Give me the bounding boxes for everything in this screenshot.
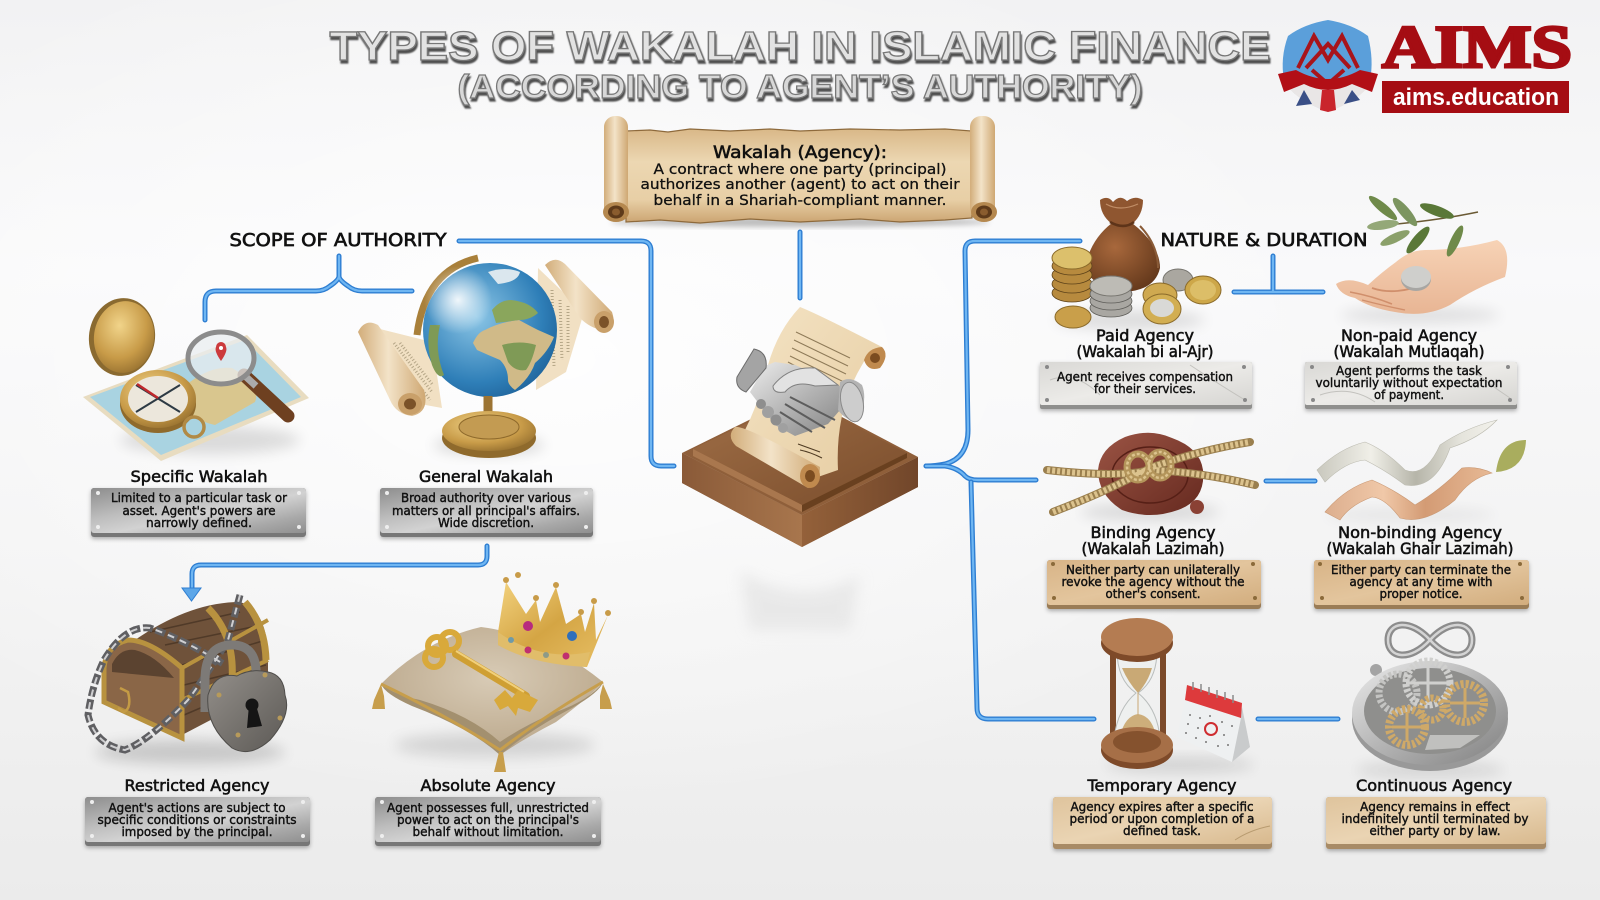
plate: restricted agency xyxy=(85,797,310,846)
logo: AIMS xyxy=(1278,14,1572,113)
plate: paid agency: for their services. xyxy=(1094,382,1196,396)
label: temporary agency: Temporary Agency xyxy=(1087,776,1236,795)
arrow: scope of authority to centre xyxy=(459,241,674,466)
label: non-paid agency xyxy=(1334,326,1484,361)
plate: binding agency: revoke the agency without the xyxy=(1062,575,1244,589)
label: continuous agency: Continuous Agency xyxy=(1356,776,1512,795)
plate: specific wakalah: asset. Agent's powers are xyxy=(122,504,276,518)
plate: paid agency xyxy=(1040,362,1252,409)
label: paid agency: (Wakalah bi al-Ajr) xyxy=(1076,342,1214,361)
label: paid agency: Paid Agency xyxy=(1096,326,1194,345)
plate: restricted agency: specific conditions or constraints xyxy=(98,813,296,827)
plate: temporary agency: period or upon completion of a xyxy=(1070,812,1254,826)
title: TYPES OF WAKALAH IN ISLAMIC FINANCE xyxy=(330,23,1270,69)
label: restricted agency: Restricted Agency xyxy=(124,776,270,795)
plate: binding agency xyxy=(1047,560,1261,609)
arrow: temporary to continuous connector xyxy=(1258,716,1338,722)
plate: continuous agency: either party or by law. xyxy=(1370,824,1500,838)
heading: scope of authority: SCOPE OF AUTHORITY xyxy=(230,230,448,251)
plate: general wakalah xyxy=(380,488,593,537)
arrow: general down to restricted xyxy=(182,546,487,601)
icon: locked chest xyxy=(88,595,287,764)
icon: flowing ribbons and leaf xyxy=(1317,420,1526,522)
plate: specific wakalah xyxy=(91,488,306,537)
arrow: centre to nature and duration xyxy=(926,241,1080,466)
plate: continuous agency: indefinitely until terminated by xyxy=(1342,812,1528,826)
icon: handshake on wooden base xyxy=(682,307,918,630)
plate: absolute agency: Agent possesses full, unrestricted xyxy=(387,801,589,815)
label: specific wakalah: Specific Wakalah xyxy=(130,467,268,486)
arrow: scope branch xyxy=(205,256,412,320)
plate: restricted agency: Agent's actions are subject to xyxy=(108,801,286,815)
icon: open hand with coin and olive branch xyxy=(1336,193,1507,323)
icon: wax seal and knotted rope xyxy=(1047,433,1255,520)
label: binding agency: Binding Agency xyxy=(1090,523,1216,542)
plate: temporary agency xyxy=(1053,797,1272,849)
plate: specific wakalah: narrowly defined. xyxy=(146,516,252,530)
arrow: paid to non-paid connector xyxy=(1234,256,1323,292)
heading: nature and duration: NATURE & DURATION xyxy=(1160,230,1368,251)
plate: binding agency: Neither party can unilaterally xyxy=(1066,563,1240,577)
plate: temporary agency: Agency expires after a specific xyxy=(1070,800,1254,814)
plate: specific wakalah: Limited to a particular task or xyxy=(111,491,287,505)
plate: paid agency: Agent receives compensation xyxy=(1057,370,1233,384)
arrow: centre to temporary xyxy=(971,482,1094,719)
plate: non-paid agency: Agent performs the task xyxy=(1336,364,1482,378)
label: binding agency: (Wakalah Lazimah) xyxy=(1082,539,1224,558)
scroll body text xyxy=(640,162,960,209)
scroll body text: A contract where one party (principal) xyxy=(654,162,946,178)
logo url box: aims.education xyxy=(1393,84,1559,111)
label: non-binding agency xyxy=(1326,523,1514,558)
plate: non-binding agency: agency at any time with xyxy=(1350,575,1492,589)
scroll body text: authorizes another (agent) to act on their xyxy=(640,177,960,193)
plate: general wakalah: matters or all principal's affairs. xyxy=(392,504,580,518)
plate: absolute agency xyxy=(375,797,601,846)
plate: absolute agency: behalf without limitation. xyxy=(412,825,564,839)
plate: non-binding agency: Either party can terminate the xyxy=(1331,563,1511,577)
plate: non-binding agency xyxy=(1314,560,1529,609)
icon: money bag and coins xyxy=(1052,198,1221,329)
icon: key, crown and pillow xyxy=(372,572,612,772)
plate: general wakalah: Wide discretion. xyxy=(438,516,534,530)
plate: absolute agency: power to act on the principal's xyxy=(397,813,579,827)
scroll heading: Wakalah (Agency): xyxy=(713,143,887,163)
plate: non-binding agency: proper notice. xyxy=(1380,587,1462,601)
label: paid agency xyxy=(1076,326,1214,361)
plate: temporary agency: defined task. xyxy=(1123,824,1201,838)
panel: definition scroll xyxy=(603,116,997,227)
plate: non-paid agency xyxy=(1305,362,1517,409)
label: non-binding agency: (Wakalah Ghair Lazimah) xyxy=(1326,539,1514,558)
icon: compass, map and magnifier xyxy=(83,294,309,461)
arrow: binding to non-binding connector xyxy=(1266,478,1315,484)
label: non-paid agency: (Wakalah Mutlaqah) xyxy=(1334,342,1484,361)
label: absolute agency: Absolute Agency xyxy=(420,776,556,795)
plate: non-paid agency: voluntarily without expectation xyxy=(1316,376,1502,390)
icon: globe and scrolls xyxy=(358,258,614,458)
icon: infinity and pocket watch gears xyxy=(1352,625,1508,777)
plate: restricted agency: imposed by the principal. xyxy=(122,825,272,839)
logo wordmark: AIMS xyxy=(1382,14,1572,80)
label: non-paid agency: Non-paid Agency xyxy=(1341,326,1477,345)
plate: binding agency: other's consent. xyxy=(1106,587,1200,601)
plate: continuous agency xyxy=(1326,797,1546,849)
icon: hourglass and calendar xyxy=(1101,618,1255,772)
icon: shield xyxy=(1278,20,1378,112)
plate: general wakalah: Broad authority over various xyxy=(401,491,571,505)
scroll body text: behalf in a Shariah-compliant manner. xyxy=(654,193,946,209)
arrow: centre to binding xyxy=(926,466,1036,480)
arrow: definition to centre xyxy=(798,232,802,298)
subtitle: (ACCORDING TO AGENT’S AUTHORITY) xyxy=(458,68,1142,105)
label: binding agency xyxy=(1082,523,1224,558)
label: non-binding agency: Non-binding Agency xyxy=(1338,523,1502,542)
plate: continuous agency: Agency remains in effect xyxy=(1360,800,1510,814)
label: general wakalah: General Wakalah xyxy=(419,467,553,486)
plate: non-paid agency: of payment. xyxy=(1374,388,1444,402)
